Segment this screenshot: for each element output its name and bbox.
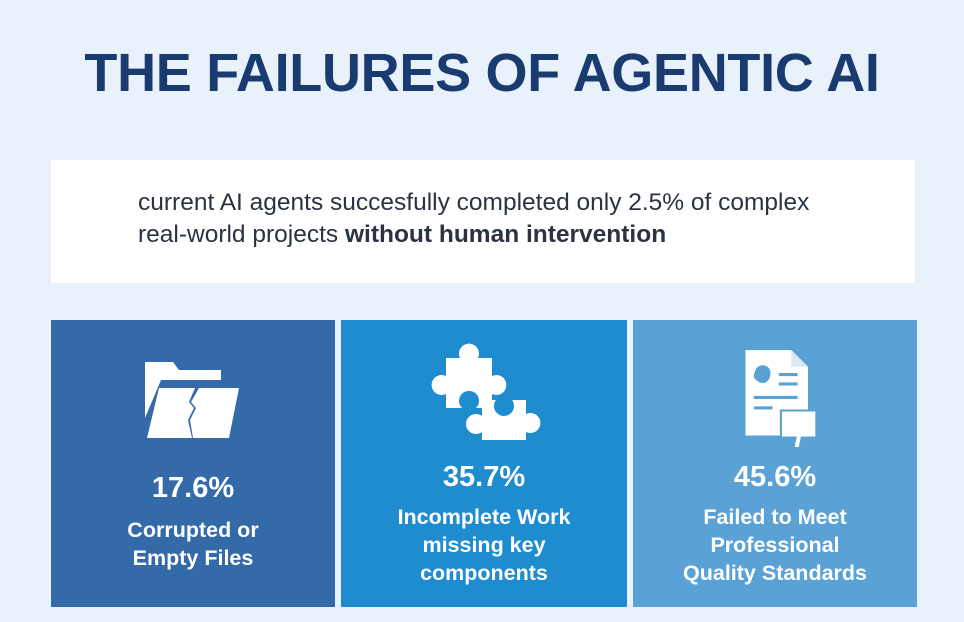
panel: corrupted files <box>51 320 335 607</box>
icon: document with thumbs down <box>746 350 816 447</box>
label: Failed to Meet <box>703 505 847 529</box>
icon: puzzle pieces <box>432 344 540 440</box>
label <box>683 505 867 585</box>
summary text box <box>51 160 915 283</box>
icon: broken folder <box>145 362 239 438</box>
label: Professional <box>710 533 840 557</box>
label: Corrupted or <box>127 518 259 542</box>
summary text box: current AI agents succesfully completed only 2.5% of complex <box>138 189 809 216</box>
label <box>127 518 259 570</box>
panel: incomplete work <box>341 320 627 607</box>
label: missing key <box>422 533 546 557</box>
label: Empty Files <box>133 546 253 570</box>
stat: 17.6% <box>152 472 234 504</box>
stat: 35.7% <box>443 461 525 493</box>
stat: 45.6% <box>734 461 816 493</box>
label <box>398 505 570 585</box>
label: components <box>420 561 548 585</box>
label: Quality Standards <box>683 561 867 585</box>
label: Incomplete Work <box>398 505 570 529</box>
title: THE FAILURES OF AGENTIC AI <box>84 43 880 103</box>
summary text box: real-world projects without human intervention <box>138 221 666 248</box>
panel: quality standards <box>633 320 917 607</box>
